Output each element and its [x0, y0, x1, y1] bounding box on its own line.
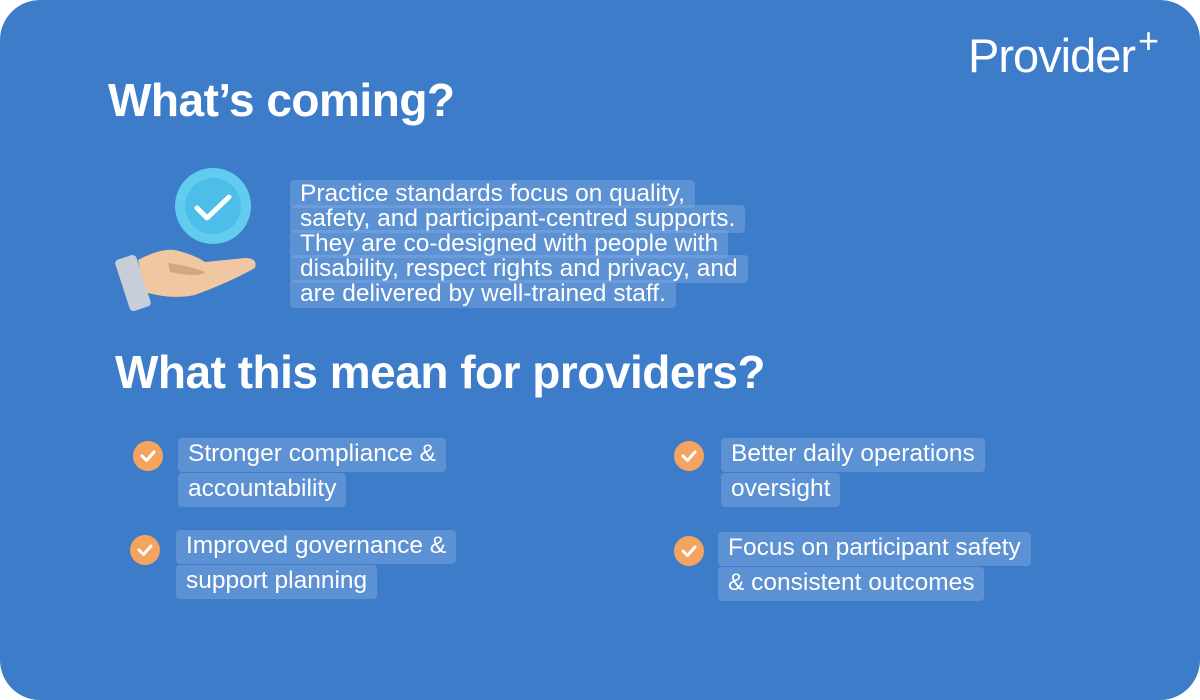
- bullet 3: [130, 530, 456, 599]
- bullet 2: [674, 438, 985, 507]
- card background: & consistent outcomes: [728, 569, 974, 596]
- card background: Improved governance &: [186, 532, 446, 559]
- card background: Stronger compliance &: [188, 440, 436, 467]
- card background: disability, respect rights and privacy, and: [300, 255, 738, 282]
- icon: hand with check: [115, 168, 256, 311]
- card background: support planning: [186, 567, 367, 594]
- card background: are delivered by well-trained staff.: [300, 280, 666, 307]
- paragraph: [290, 180, 748, 308]
- heading: what's coming: What’s coming?: [108, 74, 455, 126]
- card background: Better daily operations: [731, 440, 975, 467]
- bullet 1: [133, 438, 446, 507]
- heading: providers: What this mean for providers?: [115, 346, 765, 398]
- card background: safety, and participant-centred supports.: [300, 205, 735, 232]
- bullet 4: [674, 532, 1031, 601]
- card background: Focus on participant safety: [728, 534, 1021, 561]
- card background: oversight: [731, 475, 830, 502]
- logo: Provider: [968, 29, 1135, 82]
- card background: +: [1138, 20, 1158, 61]
- card background: They are co-designed with people with: [300, 230, 718, 257]
- card background: accountability: [188, 475, 336, 502]
- card background: Practice standards focus on quality,: [300, 180, 685, 207]
